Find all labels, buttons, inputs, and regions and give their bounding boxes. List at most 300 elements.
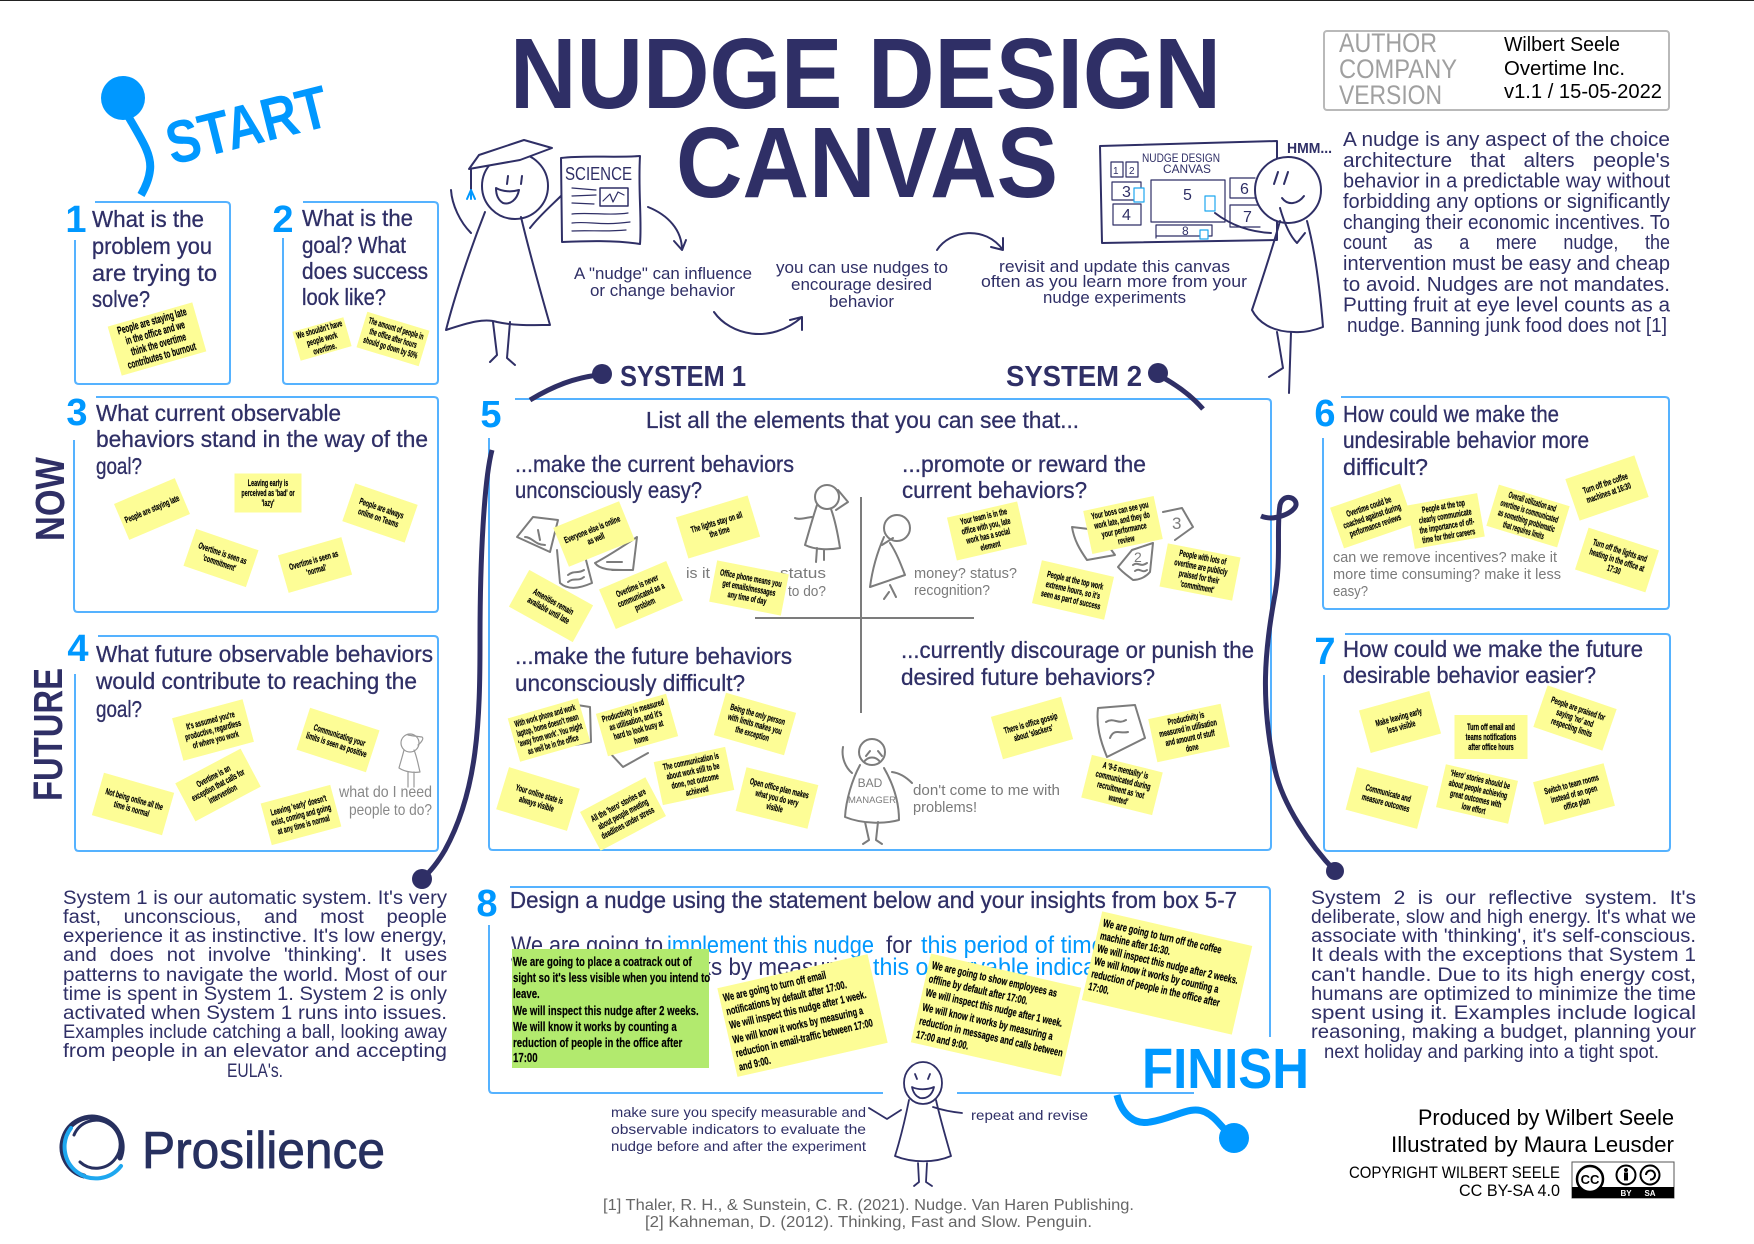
icon: papers top left [517,517,637,588]
sticky note: chosen nudge (green): We are going to place a coatrack out of [513,956,692,969]
icon: creative commons badge: BY [1620,1189,1632,1198]
panel 1: problem: problem you [92,233,212,259]
sticky note: your performance [1100,520,1148,540]
panel 4: future behaviors [67,628,438,851]
quadrant heading: future difficult: ...make the future behaviors [515,643,792,669]
text: system 1 explanation: activated when System 1 runs into issues. [63,1003,447,1024]
text: system 1 explanation: patterns to navigate the world. Most of our [63,965,448,986]
sticky note: 'Hero' stories should be [1449,767,1511,792]
sticky note: productive, regardless [184,717,242,743]
illustration: miniature canvas board: CANVAS [1163,162,1211,176]
icon: pondering figure [870,515,910,599]
author information box [1324,28,1669,110]
caption: money status recognition: money? status? [914,565,1017,582]
sticky note: limits is seen as positive [305,730,368,760]
logo: Prosilience [62,1117,385,1180]
panel 3: current behaviors: behaviors stand in the way of the [96,426,428,452]
illustration: science paper [561,156,641,244]
sticky note: goal 1 [292,317,352,361]
author information box: Wilbert Seele [1504,34,1620,56]
sticky note: 'normal' [305,562,328,578]
sticky note [234,474,302,512]
text: system 1 explanation: Examples include catching a ball, looking away [63,1022,447,1043]
sticky note: chosen nudge (green): 17:00 [513,1052,538,1065]
panel 1: problem: 1 [65,199,87,241]
caption: is it status: to do? [788,583,826,600]
sticky note: coffee nudge: 17:00. [1087,979,1111,997]
sticky note: 'lazy' [262,498,275,508]
text: system 1 explanation: time is spent in System 1. System 2 is only [63,984,448,1005]
sticky note: email nudge: reduction in email-traffic between 17:00 [734,1016,874,1059]
sticky note: offline nudge: We are going to show employees as [931,958,1058,999]
finish marker: FINISH [1142,1037,1309,1101]
panel 6: make undesirable behavior difficult: How could we make the [1343,401,1559,427]
sticky note: review [1117,533,1136,547]
panel 2: goal: 2 [272,199,294,241]
text: system 1 explanation: experience it as instinctive. It's low energy, [63,926,447,947]
sticky note: wanted' [1107,792,1129,807]
intro text: what is a nudge: behavior in a predictable way without [1343,170,1670,192]
icon: papers bottom left [575,705,648,767]
illustration: miniature canvas board: 2 [1129,166,1135,177]
text: system 1 explanation [63,888,448,1082]
panel 8: design a nudge: Design a nudge using the statement below and your insights from box 5-7 [510,887,1237,913]
sticky note: Overall utilization and [1507,489,1558,514]
panel 6: make undesirable behavior difficult: 6 [1314,393,1336,435]
icon: head scratching figure [795,485,848,562]
sticky note: Overtime is an [194,762,233,790]
panel 2: goal: look like? [302,284,386,310]
sticky note: People are praised for [1550,694,1607,723]
sticky note: the exception [734,724,771,744]
credits: Illustrated by Maura Leusder [1391,1132,1674,1157]
author information box: v1.1 / 15-05-2022 [1504,81,1662,103]
illustration: miniature canvas board: 3 [1122,184,1131,201]
sticky note: chosen nudge (green): We will inspect this nudge after 2 weeks. [513,1005,699,1018]
panel 8: design a nudge [476,883,1270,1093]
caption: grey prompts: easy? [1333,583,1368,600]
sticky note: the time [708,524,731,540]
caption: don't come to me with problems: problems! [913,799,977,816]
sticky note [991,697,1073,759]
sticky note: goal 1: We shouldn't have [295,318,343,341]
author information box: Overtime Inc. [1504,58,1625,80]
sticky note: great outcomes with [1449,788,1503,810]
sticky note: as well [586,530,606,547]
sticky note: goal 1: people work [305,329,339,349]
title: CANVAS [676,107,1058,219]
sticky note: Communicating your [312,722,367,749]
sticky note: email nudge [717,954,888,1077]
sticky note: exception that calls for [190,766,247,804]
sticky note: clearly communicate [1418,506,1472,526]
sticky note: offline nudge [911,954,1081,1076]
sticky note: less visible [1386,718,1417,736]
sticky note: laptop, home doesn't mean [515,711,580,739]
sticky note [596,694,678,756]
sticky note: instead of an open [1550,782,1599,805]
panel 1: problem [65,199,230,384]
sticky note: People at the top work [1046,568,1105,592]
caption: grey prompts: more time consuming? make it less [1333,566,1561,583]
panel 2: goal: goal? What [302,232,407,258]
label: FUTURE: FUTURE [25,668,71,801]
illustration: thinking figure with HMM [1215,157,1323,393]
label: NOW: NOW [27,457,73,541]
sticky note: overtime are publicly [1173,557,1229,578]
sticky note: The lights stay on all [689,509,744,535]
sticky note: offline nudge: reduction in messages and calls between [918,1014,1064,1059]
sticky note: office with you, late [960,515,1011,537]
caption: what do I need people to do: what do I need [338,784,432,801]
sticky note: Switch to team rooms [1543,772,1600,797]
sticky note [261,785,341,845]
text: system 2 explanation: spent using it. Examples include logical [1311,1003,1696,1024]
sticky note: available until late [526,594,572,626]
quadrant heading: future punish: ...currently discourage or punish the [901,637,1254,663]
panel 5: system 1 and 2 elements: List all the elements that you can see that... [646,407,1079,433]
nudge statement template: implement this nudge [667,932,874,959]
references [603,1197,1134,1231]
illustration: miniature canvas board: 4 [1122,207,1131,224]
sticky note: goal 2: the office after hours [368,325,418,350]
panel 3: current behaviors: 3 [66,392,88,434]
label: HMM: HMM... [1287,140,1332,157]
sticky note: Overtime is never [614,572,660,600]
sticky note: the importance of off- [1419,516,1475,536]
panel 2: goal: What is the [302,205,413,231]
panel 5: system 1 and 2 elements [480,394,1271,851]
sticky note [172,699,254,761]
references: [1] Thaler, R. H., & Sunstein, C. R. (2021). Nudge. Van Haren Publishing. [603,1197,1134,1214]
panel 6: make undesirable behavior difficult: undesirable behavior more [1343,427,1589,453]
sticky note: coached against during [1342,501,1403,531]
illustration: miniature canvas board: 6 [1240,181,1249,198]
text: system 2 explanation: It deals with the exceptions that System 1 [1311,945,1696,966]
sticky note [342,483,418,543]
illustration: miniature canvas board: 7 [1243,209,1252,226]
illustration: happy figure under panel 8 [869,1062,962,1186]
sticky note [496,767,580,831]
sticky note: Everyone else is online [562,513,622,546]
system 1 heading with marker [530,361,746,400]
sticky note: goal 1: overtime. [312,340,338,357]
sticky note: heating in the office at [1588,546,1646,574]
caption: money status recognition: recognition? [914,582,990,599]
sticky note: coffee nudge: machine after 16:30. [1099,929,1172,957]
sticky note: problem: contributes to burnout [126,340,197,371]
caption: grey prompts: can we remove incentives? make it [1333,549,1558,566]
panel 4: future behaviors: would contribute to reaching the [95,668,417,694]
system 2 heading with marker [1006,361,1203,409]
references: [2] Kahneman, D. (2012). Thinking, Fast and Slow. Penguin. [645,1214,1092,1231]
illustration: miniature canvas board: 8 [1182,224,1189,238]
sticky note: home [633,732,650,747]
arrow: use to revisit [937,233,1003,250]
sticky note: coffee nudge: reduction of people in the office after [1090,967,1222,1009]
sticky note: extreme hours, so it's [1045,578,1101,602]
sticky note: problem: in the office and we [124,318,186,347]
sticky note: measured in utilisation [1158,717,1218,740]
sticky note: overtime is communicated [1499,497,1560,525]
caption: make sure you specify: make sure you specify measurable and [611,1104,866,1120]
quadrant heading: current easy: unconsciously easy? [515,477,702,503]
icon: creative commons badge [1572,1162,1674,1198]
sticky note: chosen nudge (green): We will know it works by counting a [513,1021,677,1034]
sticky note: problem [108,302,206,376]
quadrant heading: current easy [515,451,794,503]
sticky note: chosen nudge (green): sight so it's less visible when you intend to [513,972,710,985]
caption: make sure you specify: nudge before and after the experiment [611,1138,866,1154]
panel 5: system 1 and 2 elements: 5 [480,394,502,436]
panel 1: problem: are trying to [92,260,217,286]
sticky note: problem: think the overtime [130,330,187,358]
panel 7: make desirable behavior easier [1314,631,1670,851]
illustration: science paper: SCIENCE [565,164,632,184]
credits [1349,1105,1674,1200]
sticky note: always visible [518,793,555,814]
panel 1: problem: solve? [92,286,150,312]
sticky note: coffee nudge [1082,911,1252,1035]
sticky note [1533,685,1617,751]
nudge statement template: We are going to [511,932,663,959]
sticky note: about people achieving [1448,777,1509,801]
text: system 2 explanation: reasoning, making a budget, planning your [1311,1022,1697,1043]
sticky note: praised for their [1178,568,1220,586]
caption: don't come to me with problems: don't come to me with [913,782,1060,799]
sticky note: perceived as 'bad' or [241,488,295,498]
sticky note: recruitment as 'not [1096,779,1146,801]
sticky note: about people meeting [596,796,650,832]
sticky note: chosen nudge (green): reduction of people in the office after [513,1037,683,1050]
caption: repeat and revise: repeat and revise [971,1107,1088,1123]
caption: a nudge can influence: or change behavior [590,281,735,300]
sticky note: offline nudge: We will know it works by measuring a [921,1000,1055,1042]
sticky note: email nudge: and 9:00. [737,1053,772,1073]
sticky note: achieved [685,783,710,798]
sticky note: respecting limits [1550,715,1594,740]
panel 7: make desirable behavior easier: 7 [1314,631,1336,673]
sticky note: coffee nudge: We will inspect this nudge after 2 weeks. [1096,941,1240,986]
sticky note: measure outcomes [1361,791,1411,814]
sticky note: goal 2: should go down by 50% [362,334,419,361]
sticky note [114,478,190,540]
panel 2: goal: does success [302,258,428,284]
sticky note: done [1185,741,1200,754]
sticky note: Communicate and [1364,782,1413,805]
sticky note [1533,763,1615,825]
sticky note: Leaving 'early' doesn't [269,793,328,818]
nudge statement template: this period of time. [921,932,1111,959]
sticky note [1454,715,1528,759]
sticky note: email nudge: notifications by default after 17:00. [725,978,848,1017]
caption: is it status: status [780,565,826,582]
sticky note: People at the top [1421,497,1466,515]
text: system 2 explanation: System 2 is our reflective system. It's [1311,888,1696,909]
text: system 1 explanation: EULA's. [227,1061,283,1082]
quadrant heading: current reward: current behaviors? [902,477,1087,503]
text: system 2 explanation [1311,888,1697,1063]
icon: small wondering figure [399,734,423,787]
logo: Prosilience: Prosilience [142,1122,385,1180]
text: system 1 explanation: fast, unconscious, and most people [63,907,447,928]
finish marker [1117,1037,1309,1153]
sticky note: low effort [1461,801,1487,817]
sticky note: coffee nudge: We will know it works by counting a [1093,954,1221,995]
sticky note: goal 2: The amount of people in [367,315,425,342]
caption: make sure you specify [611,1104,866,1154]
intro text: what is a nudge: forbidding any options or significantly [1343,191,1670,213]
sticky note: Turn off email and [1467,722,1515,732]
illustration: miniature canvas board: NUDGE DESIGN [1142,151,1220,165]
sticky note: 17:30 [1606,562,1622,577]
sticky note [278,537,352,593]
sticky note: machines at 16:30 [1585,480,1632,505]
arrow: system 2 connector [1261,497,1344,880]
intro text: what is a nudge: count as a mere nudge, the [1343,232,1670,254]
title: NUDGE DESIGN [510,18,1221,130]
sticky note: with limits makes you [726,711,784,737]
caption: grey prompts [1333,549,1561,600]
panel 3: current behaviors: goal? [96,453,142,479]
sticky note: online on Teams [357,506,400,530]
icon: bad manager figure [843,739,912,844]
quadrant heading: current reward [902,451,1146,503]
sticky note [92,773,174,835]
sticky note [676,495,760,559]
nudge statement template: We will know it works by measuring [511,954,863,981]
sticky note: email nudge: We will know it works by measuring a [731,1003,865,1046]
start marker [101,73,335,195]
sticky note [1159,543,1241,601]
panel 7: make desirable behavior easier: How could we make the future [1343,636,1643,662]
caption: you can use nudges [776,258,948,311]
sticky note: problem [633,595,657,613]
sticky note: 'commitment' [1179,578,1215,595]
panel 7: make desirable behavior easier: desirable behavior easier? [1343,662,1596,688]
icon: papers top right: 2 [1134,549,1142,565]
sticky note: email nudge: We are going to turn off email [722,968,827,1004]
sticky note: Open office plan makes [749,776,810,801]
caption: money status recognition [914,565,1017,599]
author information box: COMPANY [1339,54,1457,84]
system 2 heading with marker: SYSTEM 2 [1006,361,1142,393]
sticky note [1083,496,1163,554]
caption: revisit and update: often as you learn more from your [981,272,1247,291]
sticky note: saying 'no' and [1555,706,1595,730]
arrow: system 1 connector [412,450,492,889]
panel 6: make undesirable behavior difficult [1314,393,1669,609]
text: system 2 explanation: deliberate, slow and high energy. It's what we [1311,907,1696,928]
quadrant heading: current easy: ...make the current behaviors [515,451,794,477]
nudge statement template [511,932,1123,981]
icon: bad manager figure: MANAGER [848,795,896,806]
illustration: miniature canvas board: 1 [1113,166,1119,177]
sticky note [175,749,261,821]
caption: make sure you specify: observable indicators to evaluate the [611,1121,866,1137]
text: system 2 explanation: associate with 'thinking', it's self-conscious. [1311,926,1696,947]
sticky note: Overtime is seen as [288,548,339,572]
caption: don't come to me with problems [913,782,1060,816]
sticky note: All the 'hero' stories are [589,786,648,824]
start marker: START [159,73,335,178]
caption: revisit and update: revisit and update this canvas [999,257,1230,276]
panel 8: design a nudge: 8 [476,883,498,925]
caption: what do I need people to do [338,784,432,819]
quadrant heading: future difficult [515,643,792,696]
sticky note: exist, coming and going [270,802,333,828]
sticky note: office plan [1562,795,1591,812]
sticky note [1407,493,1485,549]
caption: is it status [686,565,826,600]
sticky note: work has a social [964,526,1011,546]
sticky note [296,708,380,772]
intro text: what is a nudge: nudge. Banning junk food does not [1] [1347,315,1667,337]
sticky note [1436,764,1518,824]
author information box: VERSION [1339,80,1442,110]
sticky note: A '9-5 mentality' is [1102,759,1150,781]
credits: CC BY-SA 4.0 [1459,1181,1560,1200]
text: system 2 explanation: next holiday and parking into a tight spot. [1324,1042,1659,1063]
sticky note: Amenities remain [531,586,576,617]
system 1 heading with marker: SYSTEM 1 [620,361,746,393]
sticky note: It's assumed you're [185,709,236,732]
sticky note: performance reviews [1348,511,1403,539]
sticky note: People are always [358,496,405,521]
icon: paper bottom right [1097,705,1145,757]
caption: you can use nudges: you can use nudges to [776,258,948,277]
credits: Produced by Wilbert Seele [1418,1105,1674,1130]
sticky note: seen as part of success [1040,588,1102,612]
sticky note [509,570,593,642]
sticky note: after office hours [1468,742,1514,752]
sticky note: chosen nudge (green) [512,949,710,1068]
sticky note: 'commitment' [201,552,238,574]
sticky note: offline nudge: We will inspect this nudge after 1 week. [925,986,1064,1029]
sticky note [654,747,734,805]
intro text: what is a nudge: architecture that alters people's [1343,150,1670,172]
panel 4: future behaviors: What future observable behaviors [96,641,433,667]
sticky note: done, not outcome [670,771,720,791]
illustration: miniature canvas board [1100,141,1277,243]
sticky note [553,501,635,567]
text: system 2 explanation: can't handle. Due to its high energy cost, [1311,965,1696,986]
sticky note: email nudge: We will inspect this nudge after 1 week. [728,988,867,1031]
sticky note: Productivity is [1167,709,1205,727]
intro text: what is a nudge [1343,129,1671,337]
sticky note: and amount of stuff [1164,727,1216,748]
sticky note: chosen nudge (green): leave. [513,988,540,1001]
intro text: what is a nudge: to avoid. Nudges are not mandates. [1343,274,1670,296]
sticky note: Your boss can see you [1090,499,1150,522]
sticky note: element [979,538,1002,553]
sticky note: Not being online all the [104,786,164,813]
sticky note: 'away from work'. You might [517,720,584,749]
sticky note: communicated during [1095,768,1152,792]
panel 3: current behaviors [66,392,438,612]
sticky note [1565,455,1649,521]
quadrant heading: future difficult: unconsciously difficult? [515,670,745,696]
sticky note [1346,767,1428,829]
sticky note: problem: People are staying late [116,305,188,337]
sticky note [1148,704,1230,762]
caption: revisit and update [981,257,1247,307]
sticky note: goal 2 [357,312,429,366]
quadrant heading: future punish [901,637,1254,690]
text: system 1 explanation: and does not involve 'thinking'. It uses [63,945,447,966]
caption: a nudge can influence [574,264,752,300]
intro text: what is a nudge: Putting fruit at eye level counts as a [1343,294,1671,316]
